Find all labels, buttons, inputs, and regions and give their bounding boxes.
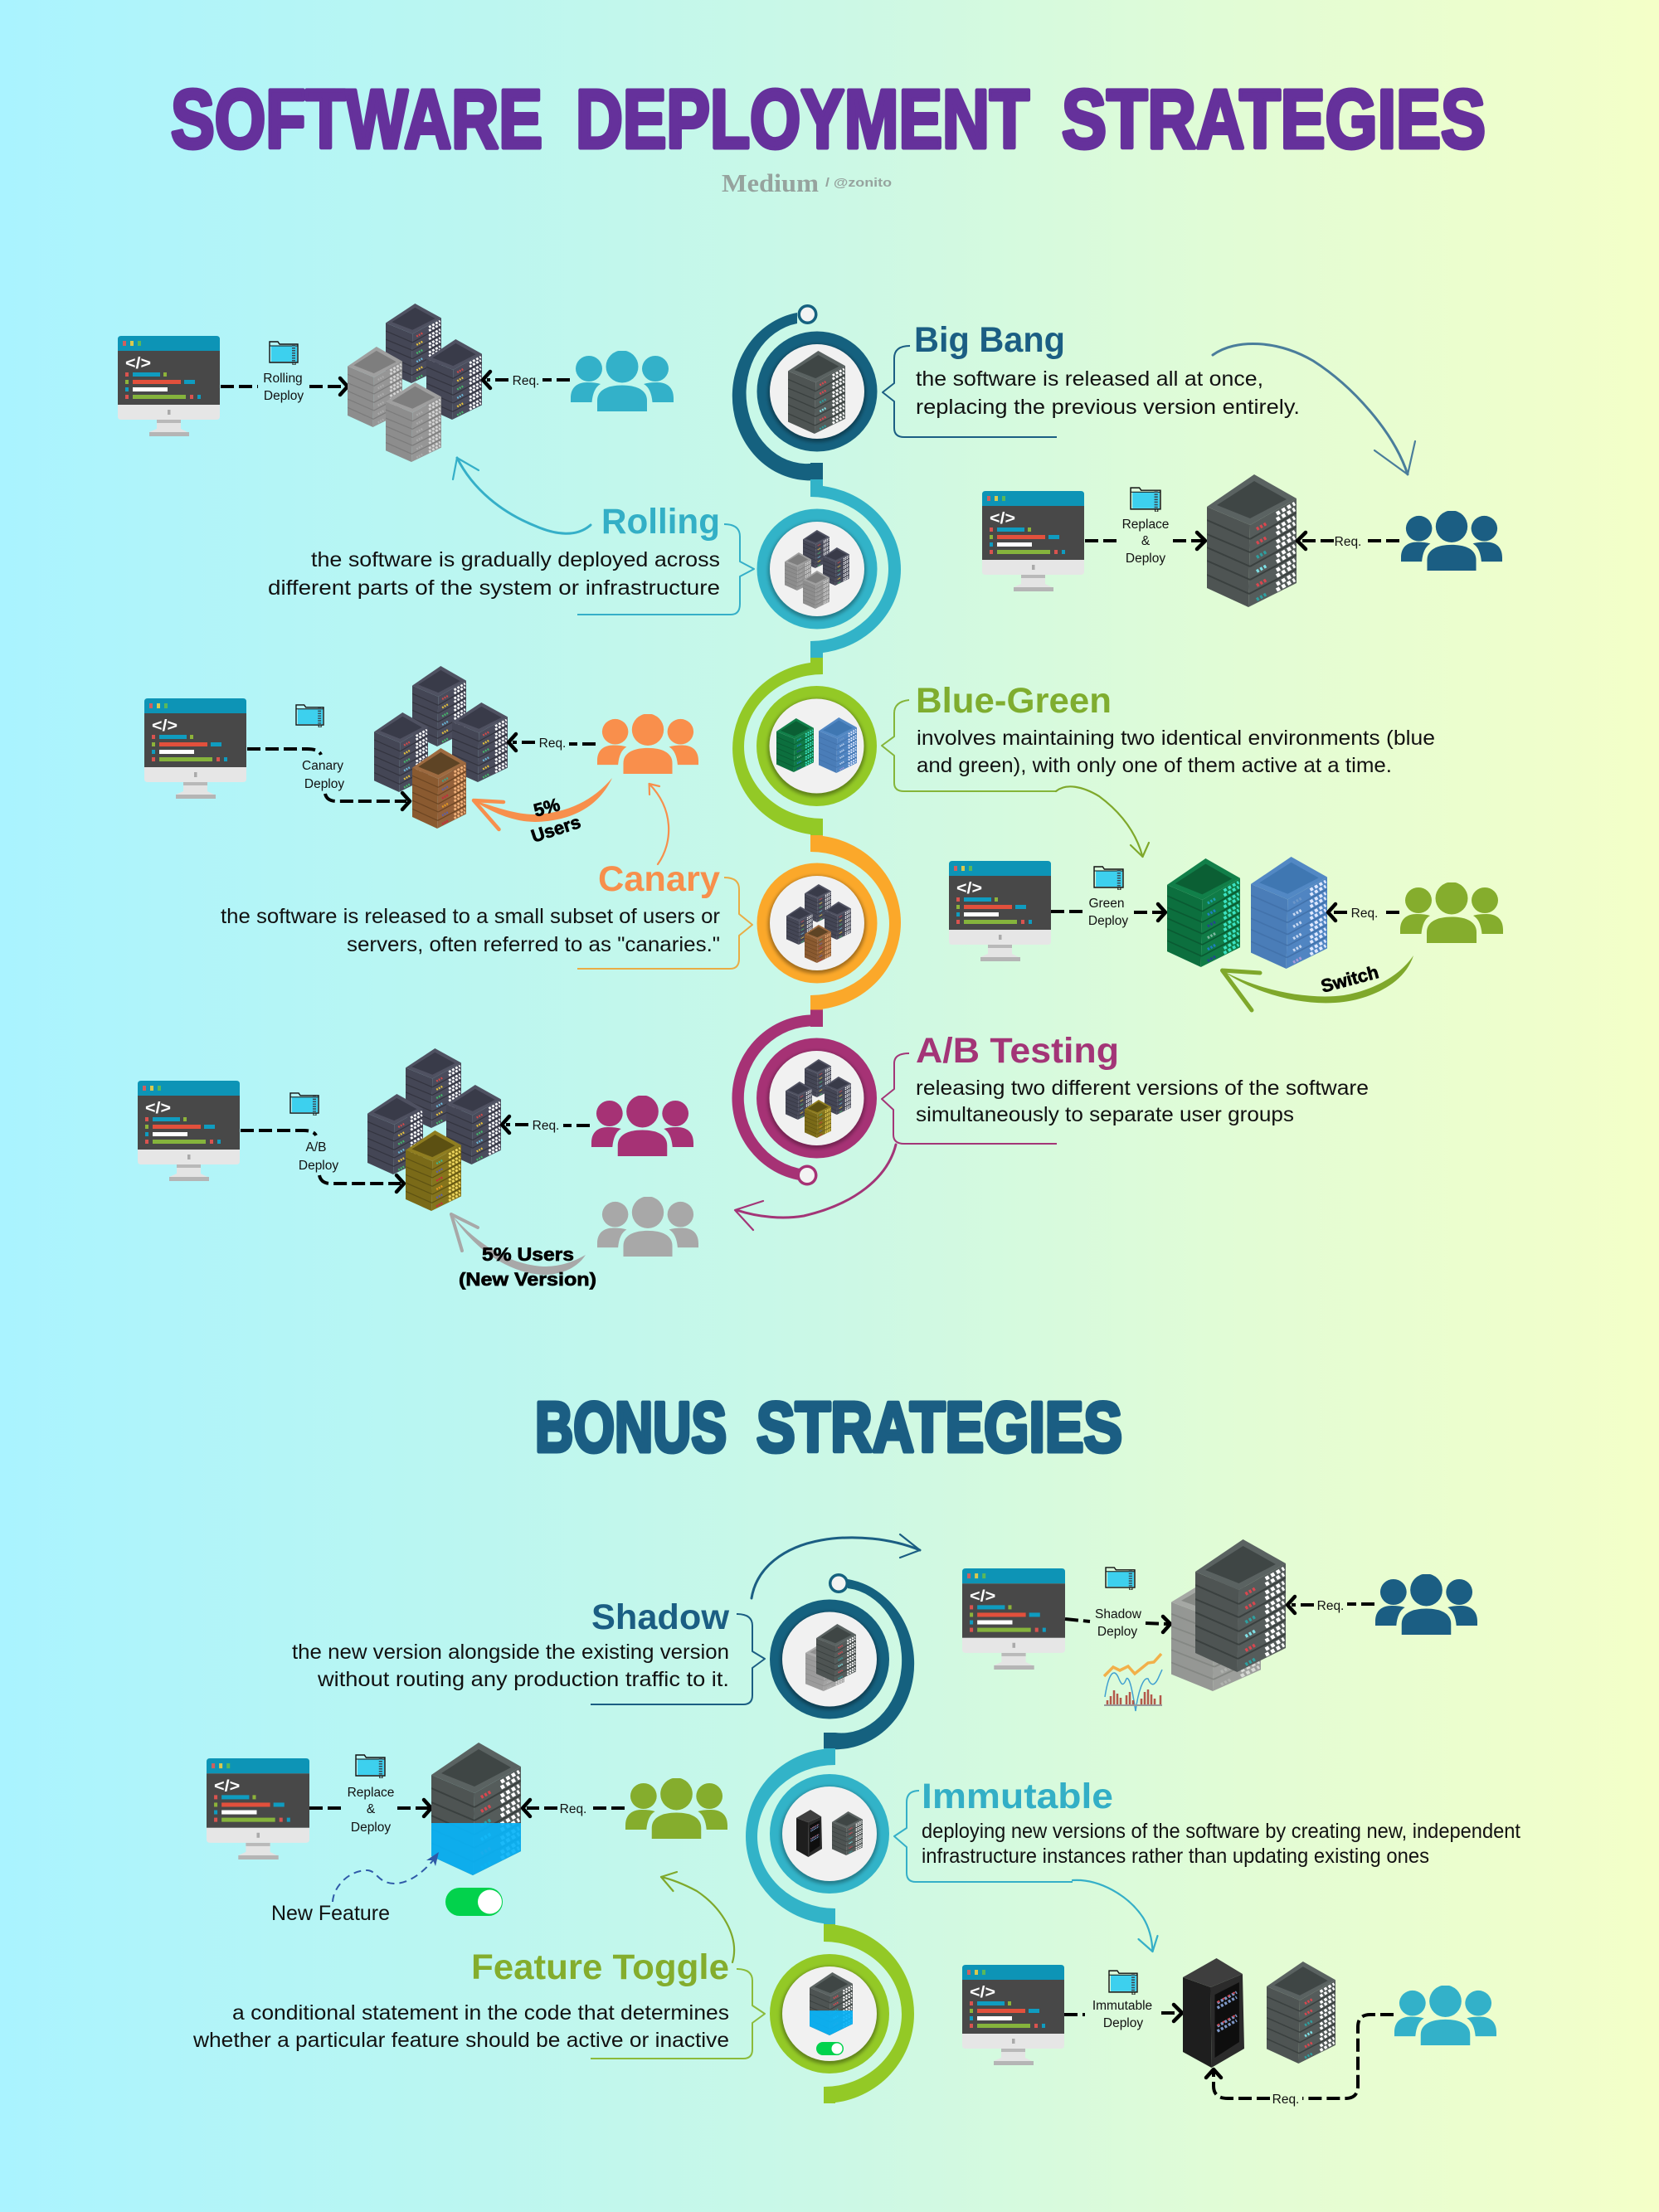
deploy diagram: A/B Testing (138, 1048, 698, 1290)
description: A/B Testing: simultaneously to separate user groups (916, 1103, 1294, 1126)
arrow: request (483, 372, 570, 388)
timeline hub: Big Bang (732, 304, 878, 480)
label: 5% Users: Users (528, 811, 583, 847)
arrow: new feature (333, 1852, 439, 1902)
arrow: request (1206, 2015, 1394, 2107)
subtitle: Medium author credit: Medium (722, 168, 819, 197)
icon: developer monitor (962, 1568, 1065, 1670)
description: Feature Toggle (192, 2001, 729, 2052)
panel: Feature Toggle (192, 1743, 914, 2103)
icon: developer monitor (144, 698, 246, 799)
arrow: request (523, 1800, 625, 1816)
icon: users (1401, 511, 1502, 571)
subtitle: Medium author credit: / @zonito (825, 176, 892, 190)
description: Canary: servers, often referred to as "canaries." (347, 933, 720, 956)
timeline hub: Shadow (770, 1573, 914, 1749)
deploy diagram: Canary (144, 666, 698, 847)
timeline hub: Rolling (757, 479, 901, 658)
deploy label: A/B (306, 1140, 326, 1155)
panel: Immutable (746, 1748, 1520, 2107)
arrow: deploy (1085, 532, 1205, 549)
deploy label (263, 372, 304, 403)
arrow: request: Req. (1317, 1599, 1344, 1613)
icon: folder (1131, 488, 1160, 512)
heading: Blue-Green: Blue-Green (916, 681, 1112, 721)
icon: folder (1106, 1568, 1135, 1590)
description: Canary: the software is released to a small subset of users or (221, 905, 720, 928)
heading: A/B Testing: A/B Testing (916, 1031, 1119, 1071)
deploy label (1122, 518, 1169, 566)
arrow: Feature Toggle to diagram (661, 1872, 734, 1962)
description: Canary (221, 905, 720, 956)
icon: green server (1167, 858, 1240, 967)
arrow: request (1287, 1597, 1374, 1613)
deploy diagram: Immutable (962, 1958, 1496, 2107)
heading: Canary: Canary (598, 859, 720, 899)
deploy diagram: Feature Toggle (207, 1743, 727, 1925)
arrow: request (1297, 532, 1399, 549)
description: Immutable: deploying new versions of the software by creating new, independent (922, 1820, 1520, 1843)
label: 5% Users (New Version): (New Version) (459, 1269, 596, 1290)
description: Shadow: without routing any production traffic to it. (317, 1668, 729, 1691)
icon: server (1267, 1962, 1335, 2064)
deploy diagram: Big Bang (982, 474, 1502, 607)
description: Rolling (268, 548, 720, 600)
heading: bonus strategies (535, 1388, 1122, 1467)
arrow: deploy (1065, 1616, 1170, 1632)
title (171, 73, 1486, 166)
arrow: deploy (1051, 904, 1165, 921)
deploy label: Deploy (304, 777, 344, 791)
deploy label: Immutable (1092, 1999, 1152, 2013)
icon: folder (290, 1093, 319, 1116)
icon: developer monitor (207, 1758, 309, 1860)
deploy diagram: Shadow (962, 1539, 1477, 1711)
icon: developer monitor (962, 1965, 1064, 2065)
panel: A/B Testing (138, 1010, 1369, 1290)
label: 5% Users (New Version) (459, 1244, 596, 1290)
panel: Shadow (292, 1534, 1477, 1749)
deploy label (1092, 1999, 1152, 2030)
arrow: deploy (1064, 2005, 1182, 2021)
deploy label: Green (1088, 897, 1125, 911)
icon: folder (270, 342, 298, 365)
icon: users (1394, 1986, 1496, 2045)
heading: Rolling: Rolling (601, 502, 720, 542)
label: 5% Users: 5% (532, 794, 562, 821)
callout bracket: Feature Toggle (591, 1969, 765, 2059)
callout bracket: Rolling (577, 524, 754, 615)
arrow: deploy (247, 749, 410, 809)
deploy diagram: Rolling (118, 304, 674, 462)
label: Switch: Switch (1319, 961, 1381, 997)
arrow: request: Req. (539, 737, 566, 751)
timeline hub: A/B Testing (732, 1010, 877, 1186)
icon: blue server (1251, 857, 1327, 969)
title: SOFTWARE (171, 73, 542, 166)
icon: folder (356, 1755, 385, 1778)
timeline hub: Blue-Green (732, 658, 877, 835)
icon: gray server behind (1171, 1573, 1261, 1691)
arrow: request (508, 734, 596, 751)
icon: toggle switch (445, 1888, 503, 1916)
heading: Immutable: Immutable (922, 1777, 1113, 1816)
arrow: request: Req. (533, 1119, 559, 1133)
arrow: Blue-Green to diagram (1056, 786, 1149, 857)
arrow: request: Req. (1272, 2093, 1299, 2107)
description: Immutable: infrastructure instances rather than updating existing ones (922, 1845, 1429, 1868)
deploy diagram: Blue-Green (949, 857, 1503, 1010)
deploy label: & (367, 1802, 376, 1816)
deploy label: Deploy (351, 1821, 391, 1835)
title: STRATEGIES (1062, 73, 1486, 166)
icon: users (1375, 1574, 1477, 1635)
deploy label: Deploy (1097, 1625, 1137, 1639)
deploy label: Replace (1122, 518, 1169, 532)
title: DEPLOYMENT (576, 73, 1029, 166)
description: Blue-Green: and green), with only one of them active at a time. (917, 754, 1392, 777)
arrow: 5% users new version (451, 1214, 586, 1275)
description: Feature Toggle: whether a particular feature should be active or inactive (192, 2029, 729, 2052)
icon: rack (1183, 1958, 1244, 2068)
icon: server cluster (348, 304, 482, 462)
deploy label: Canary (302, 759, 343, 773)
label: 5% Users (528, 794, 583, 847)
deploy label (1088, 897, 1128, 928)
deploy label (299, 1140, 338, 1173)
deploy label: & (1141, 534, 1151, 548)
icon: developer monitor (118, 336, 220, 436)
arrow: request: Req. (1351, 907, 1378, 921)
icon: folder (296, 705, 324, 727)
deploy label: Deploy (299, 1159, 338, 1173)
label: 5% Users (New Version): 5% Users (482, 1244, 574, 1265)
arrow: A/B Testing to diagram (735, 1145, 896, 1230)
arrow: Big Bang to diagram (1213, 343, 1415, 474)
arrow: deploy (309, 1800, 431, 1816)
icon: users (625, 1778, 727, 1839)
icon: users (591, 1095, 693, 1156)
description: Shadow: the new version alongside the existing version (292, 1641, 729, 1664)
icon: gray users (597, 1197, 698, 1257)
arrow: request: Req. (560, 1802, 586, 1816)
icon: developer monitor (982, 491, 1084, 591)
icon: users (1400, 882, 1503, 943)
callout bracket: Big Bang (883, 346, 1057, 437)
arrow: Canary to diagram (649, 784, 669, 864)
arrow: deploy (221, 378, 348, 395)
description: Blue-Green: involves maintaining two identical environments (blue (917, 727, 1435, 750)
description: Feature Toggle: a conditional statement in the code that determines (232, 2001, 729, 2025)
panel: Rolling (118, 304, 901, 658)
timeline hub: Immutable (746, 1748, 889, 1924)
panel: Canary (144, 666, 901, 1010)
deploy label (348, 1786, 394, 1835)
description: Shadow (292, 1641, 729, 1691)
deploy label: Deploy (1088, 914, 1128, 928)
description: Big Bang: the software is released all at once, (916, 367, 1263, 391)
deploy label (302, 759, 344, 791)
icon: users (597, 714, 698, 774)
icon: folder (1109, 1971, 1137, 1995)
heading: bonus strategies: STRATEGIES (757, 1388, 1122, 1467)
arrow: 5% users (474, 778, 612, 829)
arrow: request: Req. (513, 374, 539, 388)
deploy label: Rolling (263, 372, 303, 386)
deploy label: Replace (348, 1786, 394, 1800)
description: Rolling: the software is gradually deployed across (311, 548, 720, 571)
arrow: Rolling to diagram (453, 458, 591, 533)
arrow: deploy (241, 1130, 404, 1192)
icon: server cluster (374, 666, 508, 829)
arrow: request (502, 1116, 590, 1133)
deploy label: Deploy (264, 389, 304, 403)
timeline hub: Canary (757, 835, 901, 1010)
callout bracket: Canary (577, 878, 752, 969)
icon: server (1207, 474, 1297, 607)
panel: Blue-Green (732, 658, 1503, 1010)
icon: users (571, 350, 674, 411)
description: Blue-Green (917, 727, 1435, 777)
description: Big Bang: replacing the previous version entirely. (916, 396, 1300, 419)
deploy label: Shadow (1095, 1607, 1142, 1621)
arrow: Shadow to diagram (752, 1534, 920, 1598)
description: Immutable (922, 1820, 1520, 1868)
callout bracket: A/B Testing (882, 1053, 1057, 1144)
icon: metrics chart (1104, 1654, 1162, 1711)
icon: server with new feature (431, 1743, 521, 1875)
description: Rolling: different parts of the system or infrastructure (268, 576, 720, 600)
callout bracket: Shadow (591, 1614, 765, 1704)
callout bracket: Immutable (894, 1791, 1073, 1882)
panel: Big Bang (732, 304, 1502, 607)
timeline hub: Feature Toggle (770, 1924, 914, 2103)
heading: bonus strategies: BONUS (535, 1388, 727, 1467)
icon: dark server (1195, 1539, 1286, 1672)
arrow: Immutable to diagram (1073, 1880, 1158, 1952)
arrow: switch (1223, 955, 1413, 1010)
icon: folder (1094, 867, 1123, 890)
subtitle: Medium author credit (722, 168, 892, 197)
heading: Big Bang: Big Bang (914, 320, 1065, 360)
heading: Shadow: Shadow (591, 1597, 730, 1637)
heading: Feature Toggle: Feature Toggle (471, 1947, 729, 1987)
deploy label (1095, 1607, 1142, 1639)
description: A/B Testing (916, 1077, 1369, 1126)
callout bracket: Blue-Green (882, 700, 1056, 791)
deploy label: Deploy (1126, 552, 1165, 566)
description: A/B Testing: releasing two different versions of the software (916, 1077, 1369, 1100)
icon: developer monitor (949, 861, 1051, 961)
arrow: request (1328, 904, 1399, 921)
icon: developer monitor (138, 1081, 240, 1181)
description: Big Bang (916, 367, 1300, 419)
deploy label: Deploy (1103, 2016, 1143, 2030)
label: New Feature: New Feature (271, 1902, 390, 1925)
icon: server cluster (367, 1048, 501, 1211)
arrow: request: Req. (1335, 535, 1361, 549)
